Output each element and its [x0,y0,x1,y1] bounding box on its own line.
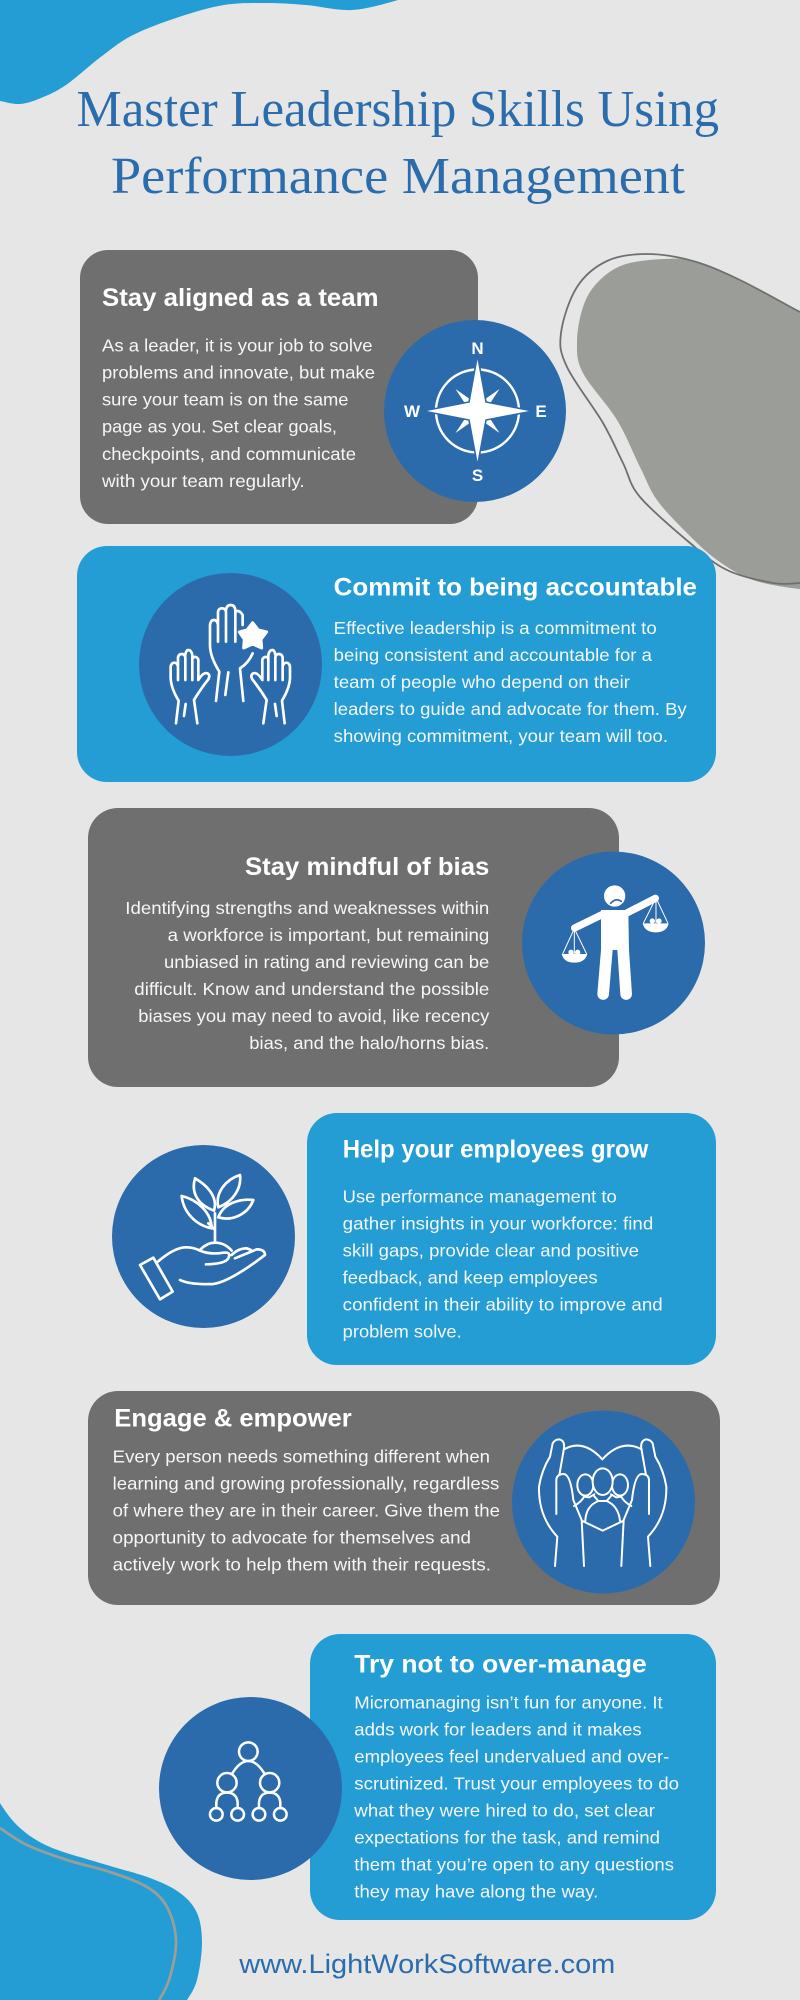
body text: expectations for the task, and remind [354,1827,660,1847]
panel: stay mindful of bias [88,808,705,1087]
body text: opportunity to advocate for themselves and [113,1527,471,1547]
body text: what they were hired to do, set clear [353,1800,655,1820]
icon: person holding scales [522,852,705,1034]
decorative line: bottom left [0,1828,176,2000]
body text: problems and innovate, but make [102,363,375,383]
panel: help your employees grow [112,1113,716,1365]
heading: Help your employees grow [343,1136,649,1164]
body text: a workforce is important, but remaining [168,925,489,945]
body text [101,336,375,491]
title [76,81,719,205]
icon: compass [384,320,566,502]
body text: gather insights in your workforce: find [343,1214,653,1234]
body text: team of people who depend on their [334,672,630,692]
body text [334,618,687,746]
body text: skill gaps, provide clear and positive [343,1241,639,1261]
body text: leaders to guide and advocate for them. By [334,699,687,719]
decorative outline: grey right [560,254,800,584]
body text: showing commitment, your team will too. [334,726,668,746]
icon: organization tree [159,1697,342,1880]
body text: learning and growing professionally, regardless [113,1473,499,1493]
heading: Commit to being accountable [334,574,697,602]
heading: Engage & empower [114,1405,352,1433]
body text [343,1187,663,1342]
body text: Use performance management to [343,1187,617,1207]
body text: Every person needs something different when [113,1446,490,1466]
body text: difficult. Know and understand the possible [134,979,489,999]
title: Performance Management [111,148,686,205]
panel: stay aligned as a team [80,250,566,524]
panel background [88,808,619,1087]
body text: sure your team is on the same [102,390,349,410]
panel: commit to being accountable [77,546,716,782]
body text: Identifying strengths and weaknesses within [125,898,489,918]
icon: raised hands with star [139,573,322,756]
body text: actively work to help them with their requests. [113,1554,491,1574]
body text: feedback, and keep employees [343,1268,598,1288]
body text: employees feel undervalued and over- [354,1746,669,1766]
panel background [80,250,478,524]
body text: Effective leadership is a commitment to [334,618,657,638]
footer website: www.LightWorkSoftware.com [238,1949,615,1979]
panel background [88,1391,720,1605]
heading: Stay mindful of bias [245,853,489,881]
panel background [310,1634,716,1920]
body text: bias, and the halo/horns bias. [249,1033,489,1053]
heading: Try not to over-manage [354,1650,647,1678]
body text [113,1446,500,1574]
body text: of where they are in their career. Give them the [113,1500,500,1520]
body text: confident in their ability to improve and [343,1295,663,1315]
icon: compass: W [404,402,421,421]
icon: compass: S [472,466,483,485]
title: Master Leadership Skills Using [76,81,719,138]
panel background [307,1113,716,1365]
panel: try not to over-manage [159,1634,716,1920]
body text: As a leader, it is your job to solve [102,336,373,356]
panel: engage and empower [88,1391,720,1605]
icon: compass: N [471,339,484,358]
body text: adds work for leaders and it makes [354,1719,642,1739]
decorative blob: top left [0,0,398,104]
body text: they may have along the way. [354,1881,598,1901]
body text: scrutinized. Trust your employees to do [354,1773,679,1793]
body text: biases you may need to avoid, like recency [138,1006,489,1026]
body text [353,1692,679,1901]
icon: hands holding team heart [512,1410,695,1594]
decorative blob: grey right [577,259,800,589]
body text: page as you. Set clear goals, [102,417,337,437]
heading: Stay aligned as a team [102,284,378,312]
decorative blob: bottom left [0,1803,202,2000]
body text: checkpoints, and communicate [102,444,356,464]
body text: problem solve. [343,1322,462,1342]
body text: with your team regularly. [101,471,305,491]
body text: being consistent and accountable for a [334,645,652,665]
panel background [77,546,716,782]
body text: them that you’re open to any questions [354,1854,674,1874]
icon: compass: E [535,402,547,421]
body text [125,898,489,1053]
body text: Micromanaging isn’t fun for anyone. It [354,1692,663,1712]
icon: hand holding plant [112,1145,295,1328]
body text: unbiased in rating and reviewing can be [164,952,489,972]
